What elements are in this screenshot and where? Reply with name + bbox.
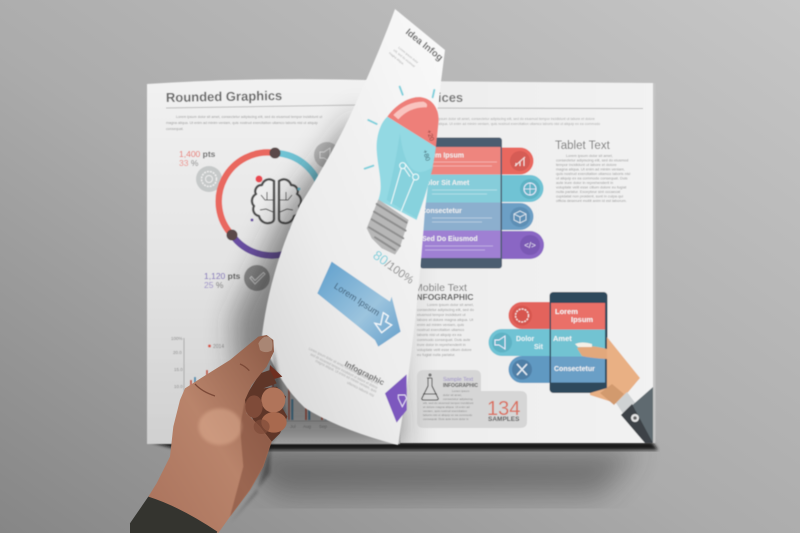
sample card [417,370,527,428]
sample paragraph [423,389,474,421]
stat: 1120 pts [204,271,241,290]
pill labels: Sit [534,344,544,351]
mobile paragraph: consectetur adipiscing elit, sed do [417,308,474,312]
tablet band labels: Sed Do Eiusmod [422,236,478,243]
bulb glass [377,117,436,220]
tablet text paragraph: voluptate velit esse cillum dolore eu fugiat [556,186,627,190]
arrow label: Lorem Ipsum [332,281,382,318]
dark fingers behind [243,370,287,442]
mobile paragraph: nostrud exercitation ullamco [417,328,464,332]
mobile paragraph: Lorem ipsum dolor sit amet, [427,303,474,307]
palm side shading [230,400,272,517]
stat: 1120 pts: 1,120 pts [204,271,241,281]
sleeve [130,497,217,533]
pill icons [492,306,532,380]
hand highlight [198,408,242,445]
arrow icon [375,313,392,333]
mobile paragraph: enim ad minim veniam, quis [417,323,464,327]
phone labels: Ipsum [571,315,593,324]
hand shadow [230,347,287,523]
lower text block: sed do eiusmod tempor incididunt ut labore et dolore [310,352,378,390]
heading: Tablet Text: Tablet Text [555,140,611,152]
phone labels [553,307,595,373]
icon: speaker [314,142,340,168]
tablet body [420,138,502,268]
shadow of turned page [232,110,400,445]
sample paragraph: consectetur adipiscing [443,397,473,401]
pills [488,302,552,383]
ring gauge [219,151,322,255]
right page intro text: aliqua. Ut enim ad minim veniam, quis nostrud exercitation ullamco laboris nisi ut aliquip ex ea commodo [438,122,600,126]
turned page intro text: Lorem ipsum dolor [397,46,419,64]
phone body [550,292,608,393]
bulb percentage labels: +80 [421,149,431,162]
hand [130,335,287,533]
heading: Infographic: Infographic [343,359,386,387]
sample paragraph: laboris nisi ut aliquip ex ea commodo [423,413,473,417]
tablet text paragraph: magna aliqua. Ut enim ad minim veniam, [556,168,625,172]
tablet text paragraph: quis nostrud exercitation ullamco laboris nisi [556,172,630,176]
sample title: Sample Text [443,377,474,383]
tablet text paragraph: consectetur adipiscing elit, sed do eiusmod [556,158,628,162]
mobile paragraph: voluptate velit esse cillum dolore [417,348,472,352]
tablet band labels: Dolor Sit Amet [421,180,470,187]
tablet text paragraph: ut aliquip ex ea commodo consequat. Duis [556,176,628,180]
icon: check mark [244,265,270,291]
sample title: INFOGRAPHIC [443,383,478,389]
bulb percentage labels: +20 [425,129,435,142]
mobile paragraph [417,303,474,357]
phone labels: Consectetur [554,366,595,373]
stat: 134 samples: 134 [487,398,520,420]
turned page [262,9,445,445]
stat: 1400 pts: 1,400 pts [179,149,216,159]
bar chart: 10.0 [174,384,183,389]
turned page intro text: elit, sed do eiusmod [393,48,416,68]
heading: Rounded Graphics: Rounded Graphics [166,88,282,105]
bar chart: 20.0 [173,350,182,355]
bar chart [171,336,338,429]
decorative dots near brain [250,176,300,232]
stat: 1400 pts: 33 % [179,158,199,168]
lower text block: Lorem ipsum dolor sit amet, consectetur adipiscing elit, [308,347,379,386]
mobile paragraph: labore et dolore magna aliqua. Ut [417,318,474,322]
book drop shadow [150,442,658,495]
purple pentagon [385,374,407,423]
bulb red cap [387,97,439,147]
sample paragraph: Lorem ipsum [452,389,470,393]
arrow banner [317,262,401,347]
mobile paragraph: commodo consequat. Duis aute [417,338,470,342]
stat: 1120 pts: 25 % [204,280,224,290]
tablet text paragraph: tempor incididunt ut labore et dolore [556,163,617,167]
tablet text paragraph: aute irure dolor in reprehenderit in [556,181,613,185]
phone infographic [488,292,653,443]
pill tabs [500,148,544,259]
heading: Mobile Text Infographic: INFOGRAPHIC [414,292,474,302]
phone bands [551,303,605,382]
sample paragraph: veniam, quis nostrud exercitation [423,409,467,413]
icon: gear [196,166,222,192]
turned page intro text [388,43,419,72]
right page [400,81,656,443]
left page intro text: Lorem ipsum dolor sit amet, consectetur adipiscing elit, sed do eiusmod tempor incididunt ut [176,115,322,119]
turned page intro text: magna aliqua. [388,51,405,66]
left page [147,79,400,444]
heading: Mobile Text Infographic [414,282,474,302]
right page intro text: ipsum dolor sit amet, consectetur adipiscing elit, sed do eiusmod tempor incididunt ut labore et dolore [438,117,595,121]
bar chart: Aug [303,424,312,429]
palm and thumb [148,335,274,533]
icon: brain [252,179,301,223]
sample paragraph: consequat. Duis aute irure dolor in [423,417,469,421]
bar chart: 100% [171,336,183,341]
mobile paragraph: irure dolor in reprehenderit in [417,343,466,347]
tablet band labels [420,152,478,243]
lower text block: magna aliqua. Ut enim ad minim veniam, quis [315,359,377,394]
bar chart: Sep [319,424,328,429]
tablet bands [420,147,500,258]
bulb filament [391,163,419,212]
icon: flask [422,374,438,400]
bulb percentage labels [421,129,435,162]
phone labels: Lorem [555,307,578,316]
lower text block: ullamco laboris nisi [346,381,375,398]
tab icons: </> [524,241,536,250]
legend: 2014 [208,344,224,350]
dark red chart marker behind thumb [268,365,282,381]
tablet text paragraph: Lorem ipsum dolor sit amet, [566,154,613,158]
fingers [245,387,287,434]
bulb screw base [367,199,409,255]
tablet text paragraph: nulla pariatur. Excepteur sint occaecat [556,190,621,194]
stat: 134 samples: SAMPLES [488,416,520,423]
heading: Devices (partly hidden): Devices [414,90,463,105]
pill labels [516,336,544,351]
tablet band labels: Lorem Ipsum [420,152,464,160]
thumb crease and thumbnail [195,336,273,396]
light bulb infographic [365,87,439,287]
bar chart: 15.0 [174,367,183,372]
mobile paragraph: eu fugiat nulla pariatur. [417,353,455,357]
mobile paragraph: laboris nisi ut aliquip ex ea [417,333,462,337]
right page intro text [438,117,600,126]
tablet infographic [420,138,544,268]
bulb value: 80/100%: 80/100% [370,247,417,287]
left page intro text [166,115,322,131]
tablet text paragraph: officia deserunt mollit anim id est laborum. [556,199,627,203]
heading: Idea Infographic (clipped by page): Idea Infog [403,27,445,64]
lower turned page content [308,262,407,423]
heading: Mobile Text Infographic: Mobile Text [414,282,467,294]
pill labels: Dolor [516,336,535,343]
stat: 1400 pts [179,149,216,168]
sample title [443,377,478,389]
hand holding phone [575,337,640,415]
tablet band labels: Consectetur [421,208,462,215]
left page intro text: consequat. [166,127,184,131]
phone labels: Amet [553,334,572,343]
tablet text paragraph [556,154,630,203]
sample paragraph: dolor sit amet, [443,393,462,397]
left page intro text: magna aliqua. Ut enim ad minim veniam, quis nostrud exercitation ullamco laboris nisi ut aliquip [166,121,318,125]
bulb rays [365,87,434,169]
mobile paragraph: eiusmod tempor incididunt ut [417,313,466,317]
sample paragraph: et dolore magna aliqua. Ut enim ad [423,405,470,409]
bar chart: Jul [290,424,296,429]
legend: 2014: 2014 [213,344,224,350]
sample paragraph: elit, sed do eiusmod tempor incididunt [423,401,474,405]
tablet text paragraph: cupidatat non proident, sunt in culpa qui [556,194,623,198]
corner sleeve [621,387,653,443]
